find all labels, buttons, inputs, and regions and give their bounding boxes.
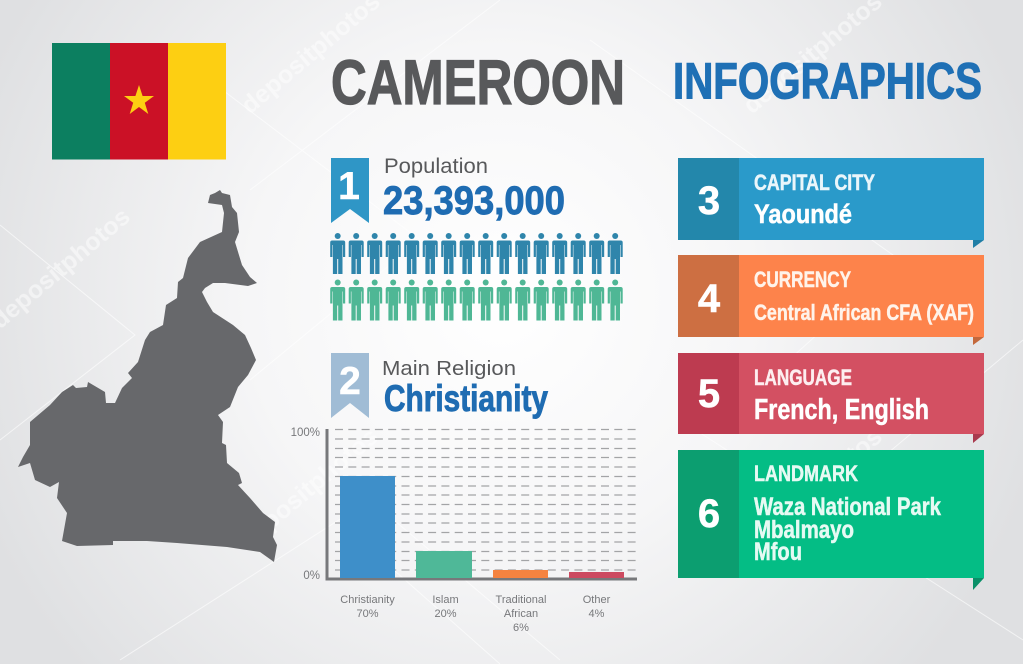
category labels: African (504, 608, 538, 620)
category labels: Islam (432, 594, 459, 606)
map of Cameroon (18, 190, 277, 562)
category labels: 20% (434, 608, 457, 620)
title: Cameroon: CAMEROON (331, 48, 625, 118)
panel: landmark: Mbalmayo (754, 516, 854, 544)
axis labels: 100% (291, 427, 320, 439)
bar: Islam (416, 551, 472, 578)
panel: language (678, 353, 984, 443)
panel: language: French, English (754, 394, 929, 426)
category labels (340, 594, 611, 634)
axis labels (291, 427, 320, 582)
category labels: 6% (513, 622, 529, 634)
icon: star (124, 85, 154, 114)
flag (52, 43, 226, 160)
religion value: Christianity (384, 378, 548, 419)
bar: Christianity (340, 476, 395, 578)
panel: currency (678, 255, 984, 345)
panel: currency: 4 (698, 277, 721, 321)
panel: landmark: Waza National Park (754, 493, 941, 521)
bar: Traditional African (493, 570, 548, 578)
ribbon 1: 1 (338, 165, 360, 208)
panel: landmark: 6 (698, 492, 720, 536)
panel: capital city (678, 158, 984, 248)
text: depositphotos (234, 422, 384, 555)
population value: 23,393,000 (383, 179, 565, 223)
panel: language: 5 (698, 372, 720, 416)
people row: green (330, 280, 623, 320)
category labels: Christianity (340, 594, 395, 606)
population heading: Population (384, 155, 488, 178)
panel: capital city: 3 (698, 179, 720, 223)
panel: capital city: CAPITAL CITY (754, 170, 875, 195)
category labels: 4% (589, 608, 605, 620)
category labels: 70% (356, 608, 379, 620)
axis labels: 0% (303, 570, 320, 582)
panel: currency: CURRENCY (754, 267, 851, 292)
text: depositphotos (738, 422, 888, 555)
panel: landmark: LANDMARK (754, 461, 858, 486)
bar chart (291, 427, 637, 634)
panel: landmark (678, 450, 984, 590)
panel: capital city: Yaoundé (754, 199, 852, 229)
panel: currency: Central African CFA (XAF) (754, 300, 974, 325)
panel: landmark: Mfou (754, 538, 802, 566)
religion heading: Main Religion (382, 358, 516, 380)
ribbon 2 (331, 353, 369, 418)
category labels: Traditional (496, 594, 546, 606)
ribbon 1 (331, 158, 369, 223)
ribbon 2: 2 (339, 360, 361, 403)
bar: Other (569, 572, 624, 578)
panel: language: LANGUAGE (754, 365, 852, 390)
people row: blue (330, 233, 623, 274)
category labels: Other (583, 594, 611, 606)
